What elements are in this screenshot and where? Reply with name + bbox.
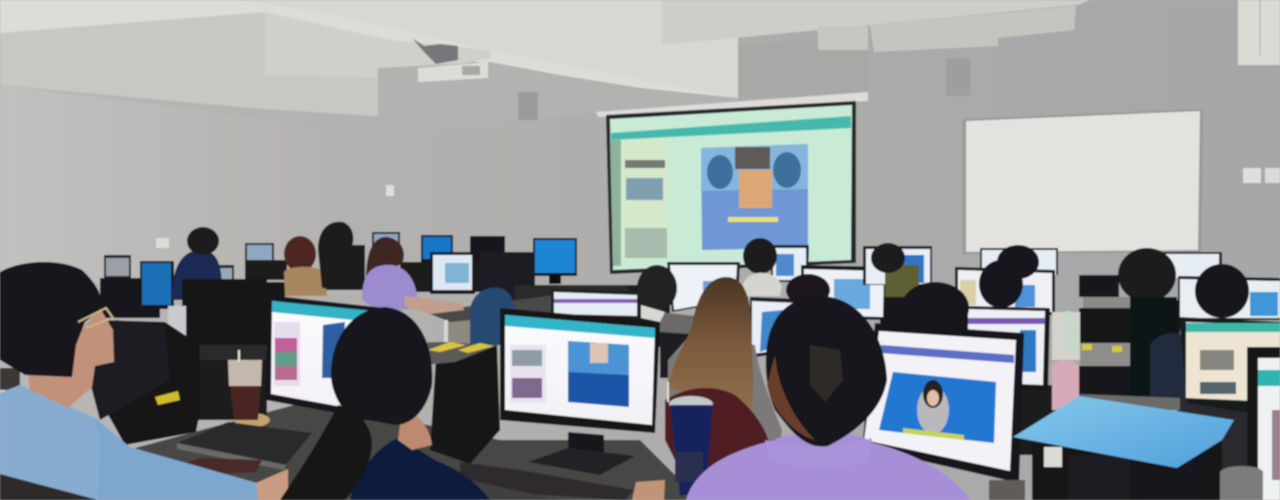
dark backpack and chairs left: [0, 279, 268, 445]
projection screen: [596, 92, 868, 274]
right monitor with poster: [862, 323, 1024, 483]
mid row students: [637, 238, 1249, 400]
whiteboard: [963, 109, 1203, 254]
keyboard left: [177, 422, 312, 470]
lower right desk towers: [989, 360, 1222, 500]
blue plastic folder: [1013, 396, 1234, 468]
student with ponytail: [280, 307, 490, 500]
projector: [412, 38, 488, 82]
steel tumbler: [1220, 466, 1263, 500]
dark furniture mass behind mid row: [445, 285, 1252, 470]
monitor with colour palette, left: [266, 295, 385, 420]
plaid jacket: [665, 388, 770, 470]
mid row towers: [1079, 275, 1153, 398]
phone on desk: [188, 458, 262, 475]
back row students: [172, 222, 515, 345]
right edge monitors: [1179, 317, 1280, 500]
student with long brown hair: [668, 277, 782, 480]
keyboard centre: [460, 462, 634, 500]
mid row monitors: [551, 245, 1280, 390]
central monitor and stand: [500, 308, 660, 475]
student in denim shirt: [0, 262, 288, 500]
foreground left desk: [135, 342, 700, 500]
iced drink cup: [228, 350, 270, 427]
student in lilac shirt: [686, 296, 970, 500]
blue tumbler: [667, 382, 713, 496]
hand at centre keyboard: [632, 480, 665, 500]
back row desks and computers: [100, 232, 640, 342]
